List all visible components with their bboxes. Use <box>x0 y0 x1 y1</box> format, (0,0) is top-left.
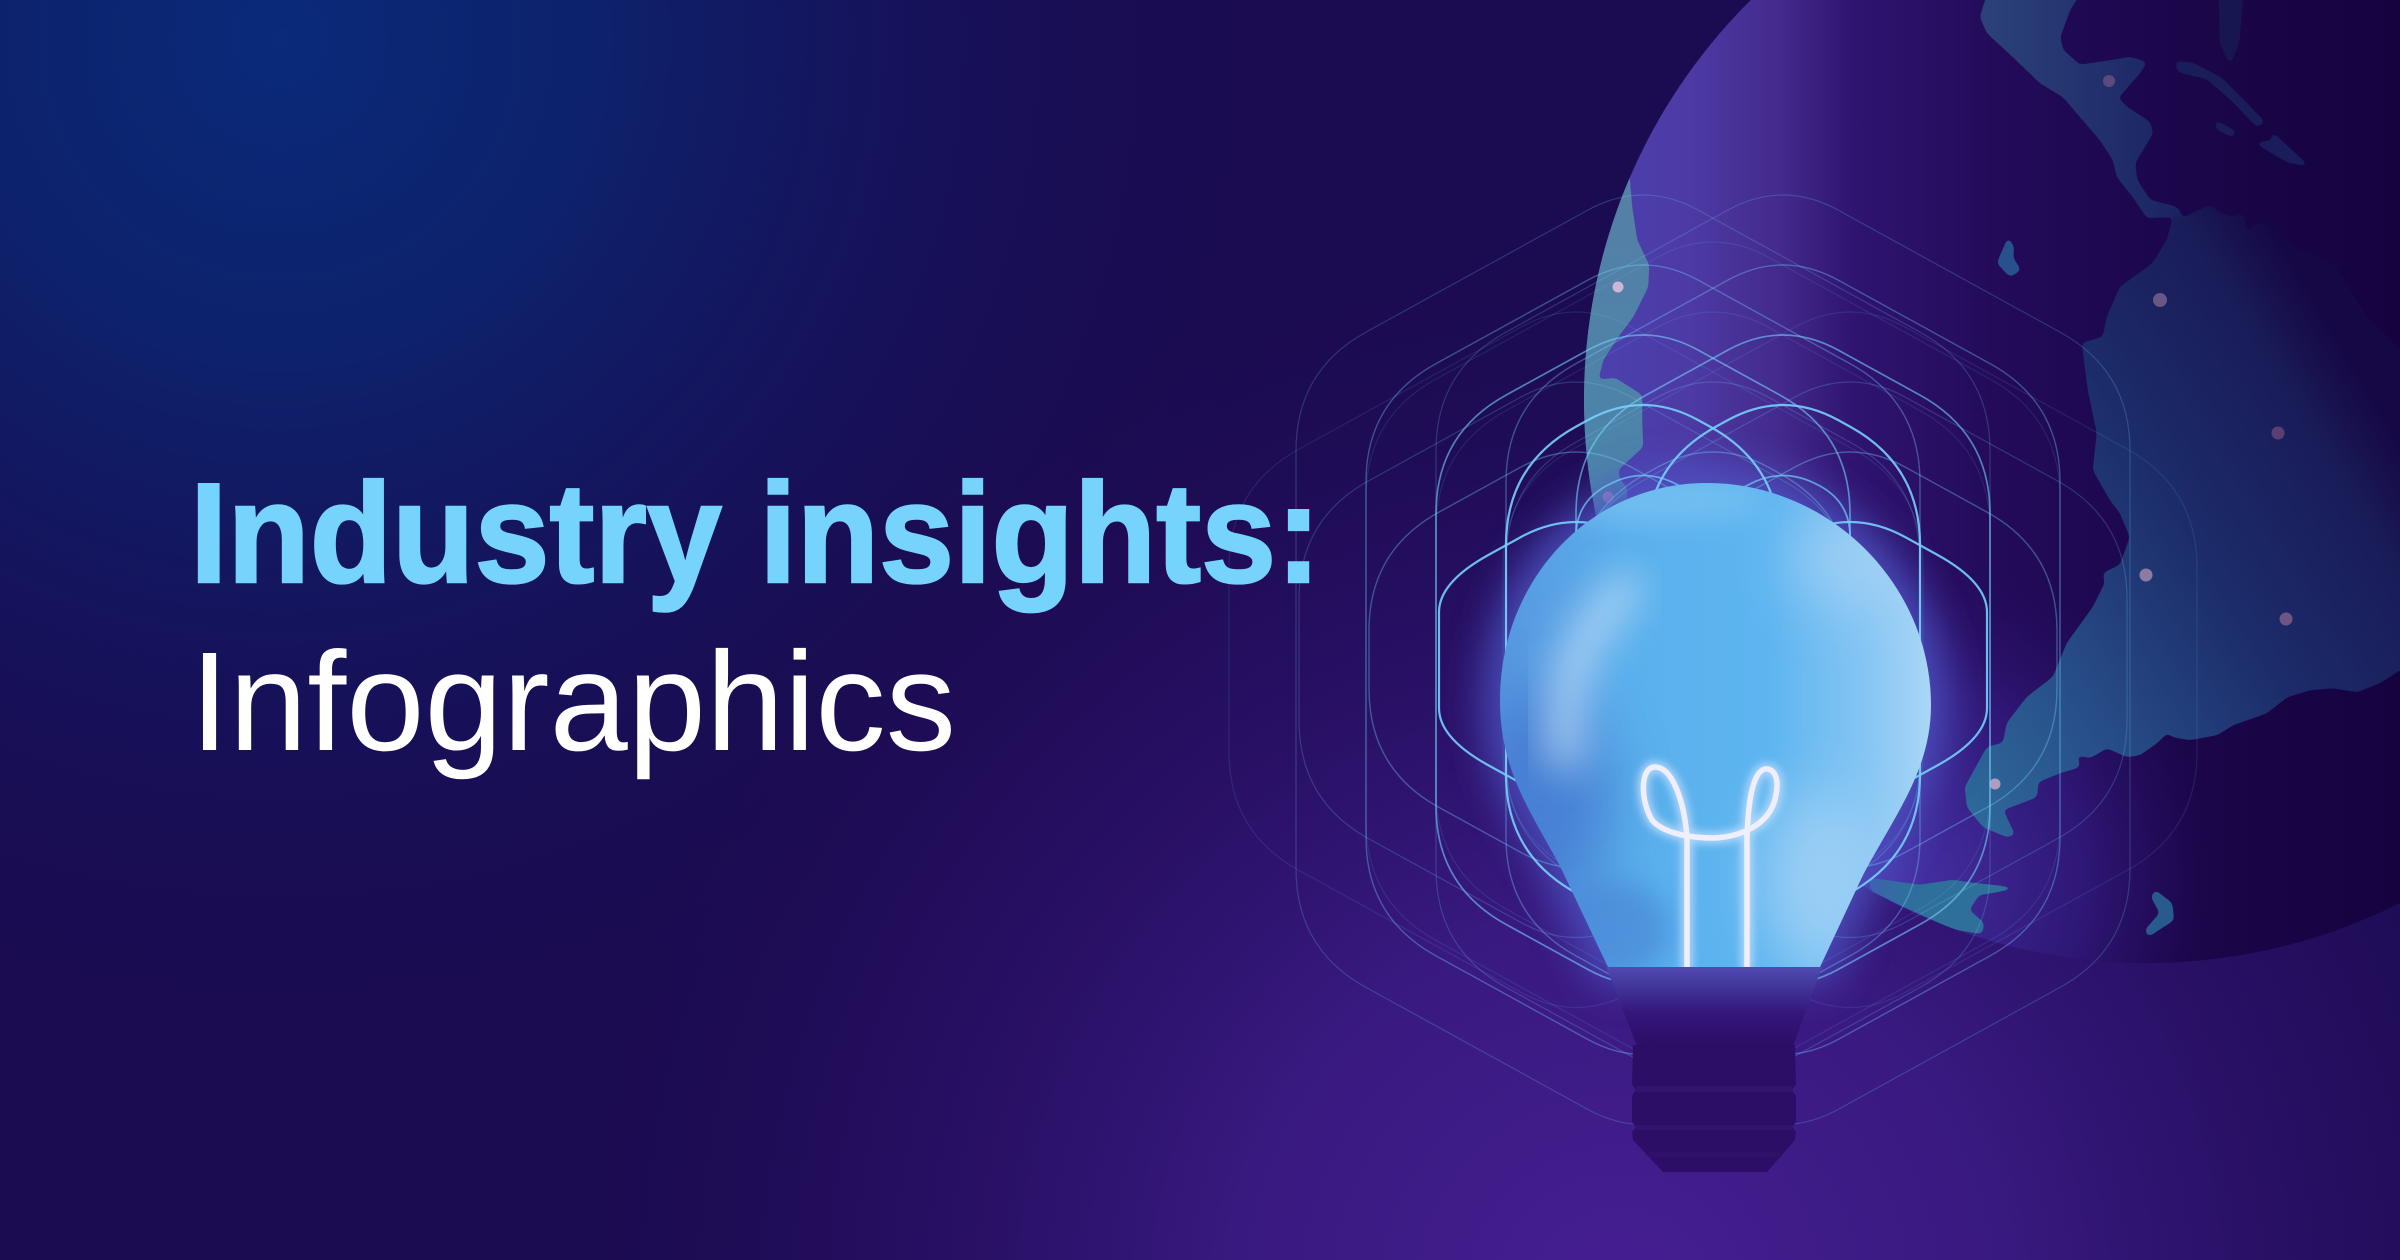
glow on globe near the bulb <box>1859 626 2175 963</box>
land: South America <box>1965 205 2400 837</box>
bulb base collar <box>1606 967 1822 1046</box>
land: Africa edge <box>1500 172 1649 560</box>
concentric rounded hexagon line pattern <box>1229 195 2197 1124</box>
land: small islands <box>1870 0 2310 937</box>
land: Central America <box>1980 0 2183 218</box>
globe <box>1584 0 2400 963</box>
filament <box>1643 767 1777 967</box>
subheading: Infographics: Infographics <box>190 622 956 780</box>
city dots <box>1602 75 2292 790</box>
bulb glass <box>1500 483 1931 967</box>
bulb screw thread <box>1632 1045 1796 1172</box>
icon: light bulb <box>1470 470 1940 1172</box>
land masses <box>1500 0 2400 937</box>
heading: Industry insights: Industry insights: <box>190 454 1321 613</box>
glow behind bulb <box>1500 483 1931 967</box>
title <box>190 454 1321 780</box>
